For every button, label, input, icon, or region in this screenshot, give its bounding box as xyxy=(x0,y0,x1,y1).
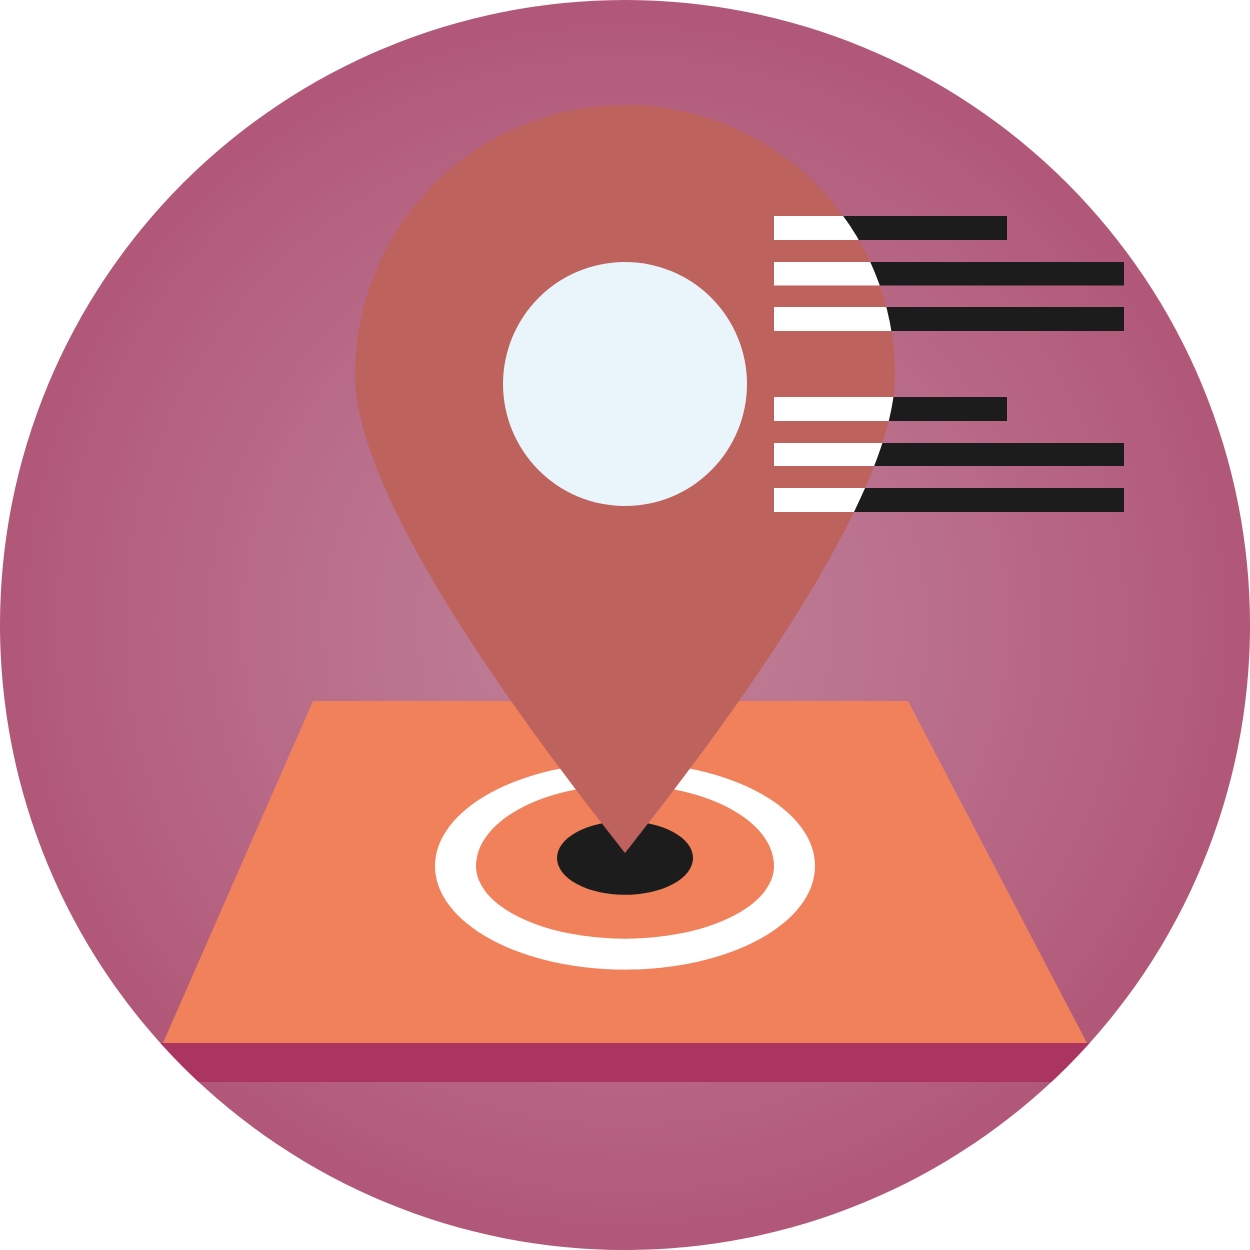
map plane xyxy=(163,701,1087,1043)
text lines: dark segments xyxy=(774,216,1124,512)
map base edge xyxy=(160,1043,1090,1082)
pin hole xyxy=(503,262,747,506)
location pin xyxy=(355,105,895,853)
target rings on map xyxy=(435,762,815,970)
text lines: white segments inside pin xyxy=(774,216,894,512)
